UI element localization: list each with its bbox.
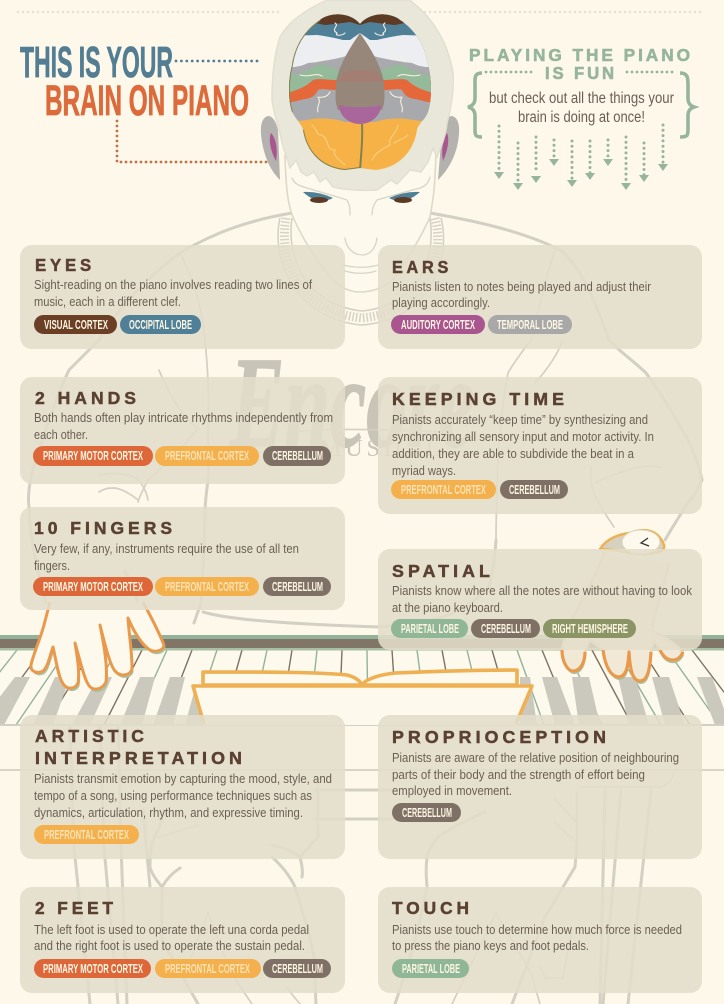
panel: proprioception: PROPRIOCEPTION	[392, 727, 610, 747]
black keys	[0, 677, 724, 725]
tag: cerebellum: CEREBELLUM	[509, 483, 560, 497]
tag: prefrontal cortex	[34, 825, 139, 844]
tag: cerebellum: CEREBELLUM	[272, 962, 323, 976]
tag: cerebellum	[392, 803, 461, 822]
head illustration	[261, 0, 459, 325]
panel: 2 feet: 2 FEET	[35, 898, 117, 918]
dotted arrows	[494, 125, 668, 190]
callout: playing the piano is fun: PLAYING THE PIANO	[469, 45, 693, 65]
decorative top dotted rule	[18, 11, 705, 13]
panel: keeping time	[378, 377, 702, 514]
piano keyboard	[0, 635, 724, 725]
panel: keeping time: addition, they are able to subdivide the beat in a	[392, 446, 635, 461]
watch	[600, 530, 664, 554]
hair	[272, 0, 453, 190]
panel: touch: Pianists use touch to determine how much force is needed	[392, 922, 682, 937]
title: BRAIN ON PIANO	[45, 77, 249, 125]
panel: eyes	[20, 245, 345, 349]
panel: artistic interpretation: INTERPRETATION	[35, 748, 246, 768]
tag: prefrontal cortex	[155, 959, 261, 978]
tag: auditory cortex: AUDITORY CORTEX	[401, 318, 475, 332]
tag: cerebellum: CEREBELLUM	[272, 449, 323, 463]
panel: proprioception: Pianists are aware of the relative position of neighbouring	[392, 750, 679, 765]
right hemisphere bands	[360, 10, 435, 122]
tag: prefrontal cortex	[155, 446, 259, 466]
panel: artistic interpretation: Pianists transmit emotion by capturing the mood, style, and	[34, 771, 332, 786]
logo watermark: MUSIC L	[320, 436, 440, 462]
panel: 2 hands: 2 HANDS	[35, 388, 140, 408]
panel: ears: EARS	[392, 257, 452, 277]
panel: keeping time: synchronizing all sensory input and motor activity. In	[392, 429, 654, 444]
ears	[261, 116, 459, 180]
tag: primary motor cortex	[33, 577, 153, 596]
tag: prefrontal cortex: PREFRONTAL CORTEX	[165, 962, 250, 976]
panel: touch	[378, 887, 702, 993]
open music book	[193, 670, 532, 725]
tag: parietal lobe	[392, 959, 469, 978]
tag: occipital lobe: OCCIPITAL LOBE	[129, 318, 192, 332]
panel: proprioception: parts of their body and the strength of effort being	[392, 767, 645, 782]
tag: prefrontal cortex	[155, 577, 259, 596]
background figure: bench and legs line art	[0, 725, 724, 1004]
panel: keeping time: KEEPING TIME	[392, 389, 568, 409]
tag: visual cortex: VISUAL CORTEX	[44, 318, 108, 332]
panel: 2 hands: Both hands often play intricate rhythms independently from	[34, 410, 333, 425]
tag: primary motor cortex	[34, 959, 151, 978]
panel: spatial: at the piano keyboard.	[392, 600, 503, 615]
tag: temporal lobe	[488, 315, 572, 334]
brain	[289, 14, 431, 170]
title: THIS IS YOUR	[20, 38, 173, 87]
tag: occipital lobe	[120, 315, 201, 334]
central fissure	[360, 124, 362, 170]
face	[285, 150, 436, 292]
tag: prefrontal cortex: PREFRONTAL CORTEX	[165, 580, 249, 594]
tag: cerebellum	[263, 577, 331, 596]
logo watermark: Encore	[229, 331, 475, 475]
panel: proprioception	[378, 715, 702, 859]
tag: primary motor cortex: PRIMARY MOTOR CORTEX	[43, 449, 143, 463]
panel: 10 fingers: fingers.	[34, 558, 70, 573]
background figure: torso and arms line art	[28, 213, 702, 627]
tag: prefrontal cortex: PREFRONTAL CORTEX	[165, 449, 249, 463]
panel: 2 feet	[20, 887, 345, 993]
left hemisphere bands	[285, 10, 360, 122]
callout: playing the piano is fun: but check out all the things your	[489, 90, 674, 107]
tag: cerebellum	[471, 619, 540, 638]
panel: artistic interpretation: dynamics, articulation, rhythm, and expressive timing.	[34, 805, 303, 820]
tag: prefrontal cortex: PREFRONTAL CORTEX	[44, 828, 129, 842]
panel: ears	[378, 245, 702, 349]
panel: eyes: EYES	[35, 255, 95, 275]
tag: cerebellum	[263, 959, 331, 978]
neck collar	[278, 218, 444, 325]
facial lines	[292, 177, 430, 273]
panel: ears: playing accordingly.	[392, 295, 490, 310]
tag: right hemisphere: RIGHT HEMISPHERE	[552, 622, 628, 636]
panel: spatial	[378, 549, 702, 650]
callout: playing the piano is fun: IS FUN	[545, 63, 617, 83]
tag: cerebellum	[500, 480, 568, 499]
panel: 2 feet: and the right foot is used to operate the sustain pedal.	[34, 938, 305, 953]
tag: cerebellum: CEREBELLUM	[481, 622, 531, 636]
panel: artistic interpretation: ARTISTIC	[35, 726, 148, 746]
callout: playing the piano is fun	[468, 45, 694, 190]
tag: prefrontal cortex	[391, 480, 496, 499]
panel: 10 fingers: 10 FINGERS	[34, 518, 176, 538]
tag: primary motor cortex: PRIMARY MOTOR CORTEX	[43, 962, 143, 976]
panel: artistic interpretation: tempo of a song, using performance techniques such as	[34, 788, 312, 803]
tag: cerebellum: CEREBELLUM	[402, 806, 452, 820]
panel: 10 fingers	[20, 507, 345, 610]
tag: cerebellum: CEREBELLUM	[272, 580, 323, 594]
panel: eyes: Sight-reading on the piano involves reading two lines of	[34, 277, 312, 292]
frontal folds	[312, 125, 408, 165]
key lines	[0, 650, 724, 725]
tag: prefrontal cortex: PREFRONTAL CORTEX	[401, 483, 486, 497]
panel: keeping time: Pianists accurately “keep time” by synthesizing and	[392, 412, 648, 427]
tag: parietal lobe	[391, 619, 468, 638]
panel: spatial: SPATIAL	[392, 561, 494, 581]
tag: temporal lobe: TEMPORAL LOBE	[497, 318, 563, 332]
panel: touch: TOUCH	[392, 898, 473, 918]
panel: 2 feet: The left foot is used to operate the left una corda pedal	[34, 922, 309, 937]
panel: 2 hands	[20, 377, 345, 484]
panel: touch: to press the piano keys and foot pedals.	[392, 938, 589, 953]
eyes	[303, 192, 420, 203]
right hand and wristwatch	[562, 530, 684, 684]
panel: proprioception: employed in movement.	[392, 783, 512, 798]
tag: cerebellum	[263, 446, 331, 466]
tag: primary motor cortex: PRIMARY MOTOR CORTEX	[43, 580, 143, 594]
title	[20, 38, 270, 162]
fallboard band	[0, 635, 724, 650]
tag: auditory cortex	[391, 315, 485, 334]
panel: eyes: music, each in a different clef.	[34, 294, 181, 309]
panel: artistic interpretation	[20, 715, 345, 859]
tag: primary motor cortex	[33, 446, 153, 466]
tag: parietal lobe: PARIETAL LOBE	[402, 962, 460, 976]
panel: 10 fingers: Very few, if any, instruments require the use of all ten	[34, 541, 299, 556]
panel: ears: Pianists listen to notes being played and adjust their	[392, 279, 652, 294]
panel: keeping time: myriad ways.	[392, 463, 456, 478]
tag: parietal lobe: PARIETAL LOBE	[401, 622, 459, 636]
central core	[336, 33, 384, 110]
curly braces	[468, 73, 694, 137]
tag: right hemisphere	[543, 619, 636, 638]
tag: visual cortex	[34, 315, 117, 334]
left hand	[31, 602, 165, 692]
panel: 2 hands: each other.	[34, 427, 88, 442]
callout: playing the piano is fun: brain is doing at once!	[518, 109, 645, 126]
logo watermark	[229, 331, 475, 475]
